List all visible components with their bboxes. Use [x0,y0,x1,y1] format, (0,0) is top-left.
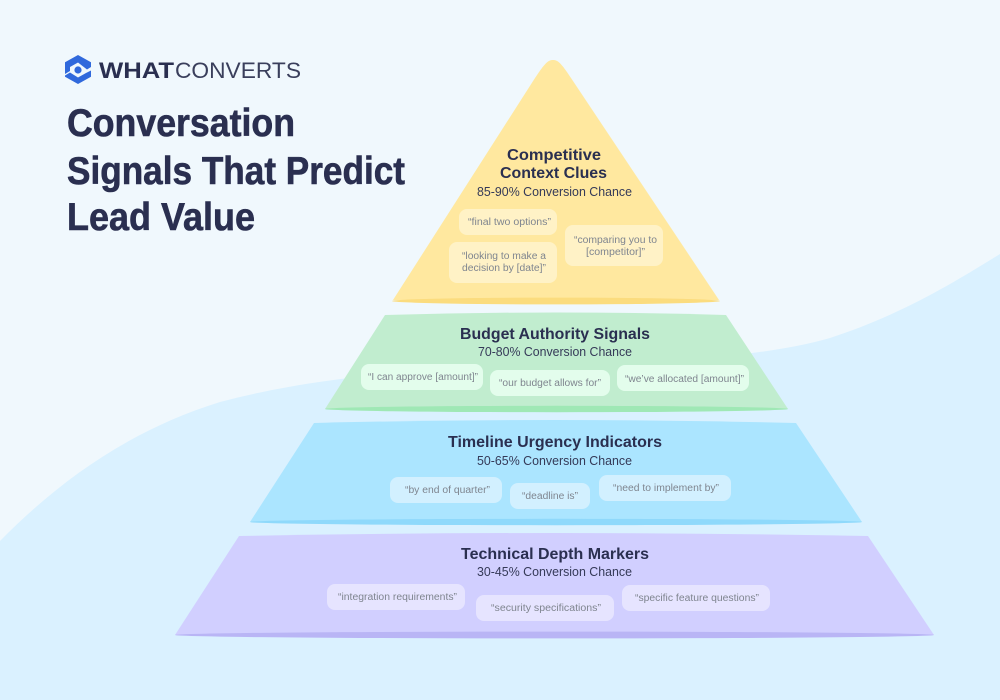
panel: technical depth markers [175,533,934,638]
chip: by end of quarter [390,477,502,503]
logo: WhatConverts [65,55,301,84]
pyramid tier: blue [250,420,862,525]
title: Conversation [67,102,295,145]
pyramid tier: purple [175,533,934,638]
heading: Competitive [507,147,601,164]
icon: hexagon logo mark [65,55,91,84]
chip: I can approve [361,364,483,390]
chip: our budget allows for: “our budget allows for” [499,378,601,389]
chip: integration requirements [327,584,465,610]
chip: by end of quarter: “by end of quarter” [405,485,490,496]
chip: security specifications [476,595,614,621]
chip: need to implement by [599,475,731,501]
chip: integration requirements: “integration requirements” [338,592,457,603]
panel: competitive context clues [392,60,720,304]
chip: comparing you to competitor: “comparing you to [574,235,657,246]
panel: budget authority signals [325,312,788,412]
pyramid tier: yellow apex [392,60,720,304]
chip: comparing you to competitor: [competitor]” [586,247,645,258]
chip: specific feature questions [622,585,770,611]
chip: specific feature questions: “specific feature questions” [635,593,759,604]
conversion chance: 50-65% Conversion Chance [477,454,632,468]
chip: need to implement by: “need to implement by” [613,483,719,494]
conversion chance: 70-80% Conversion Chance [478,345,632,359]
chip: final two options: “final two options” [468,217,551,228]
wordmark: WHAT [99,58,175,83]
chip: comparing you to competitor [565,225,663,266]
chip: I can approve: “I can approve [amount]” [368,372,478,383]
chip: deadline is: “deadline is” [522,491,578,502]
heading: Technical Depth Markers [461,546,649,563]
panel: competitive context clues: Context Clues [500,165,607,182]
chip: looking to make a decision: decision by [date]” [462,263,546,274]
chip: looking to make a decision [449,242,557,283]
chip: we've allocated [617,365,749,391]
pyramid tier: green [325,312,788,412]
heading: Budget Authority Signals [460,326,650,343]
title [67,102,405,239]
heading: Timeline Urgency Indicators [448,434,662,451]
wordmark: CONVERTS [175,58,301,83]
title: Lead Value [67,196,255,239]
chip: security specifications: “security specifications” [491,603,601,614]
panel: timeline urgency indicators [250,420,862,525]
conversion chance: 85-90% Conversion Chance [477,185,632,199]
chip: our budget allows for [490,370,610,396]
chip: we've allocated: “we’ve allocated [amount]” [625,374,744,385]
conversion chance: 30-45% Conversion Chance [477,565,632,579]
title: Signals That Predict [67,150,405,193]
chip: deadline is [510,483,590,509]
chip: looking to make a decision: “looking to make a [462,251,546,262]
chip: final two options [459,209,557,235]
